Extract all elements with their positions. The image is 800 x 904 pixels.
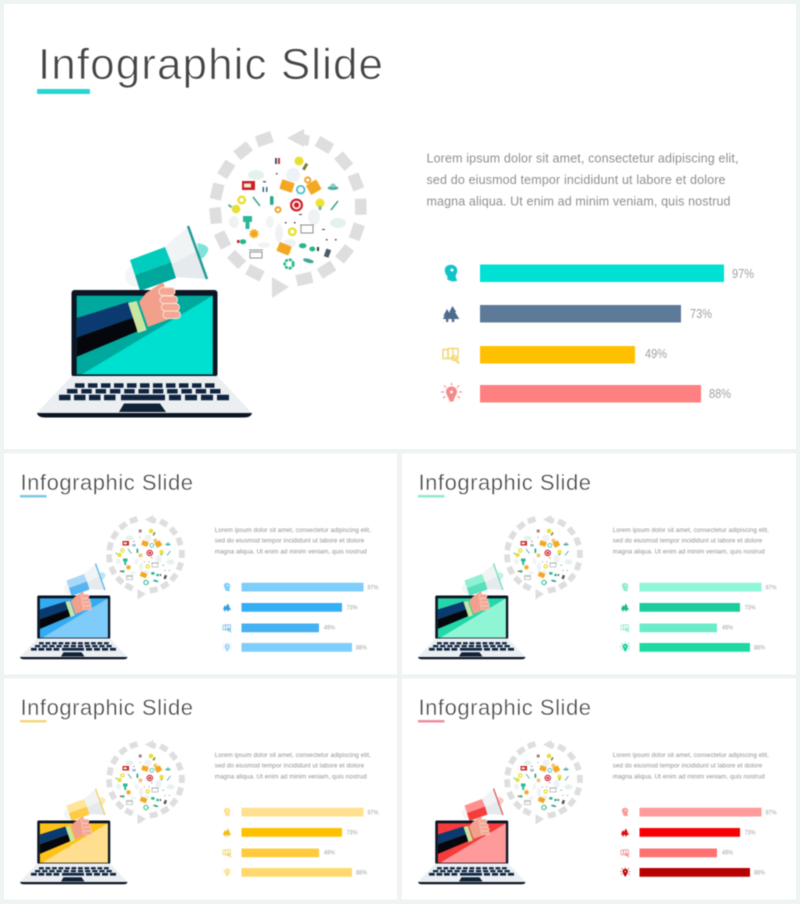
red slide contents: [418, 695, 777, 884]
green icons: [620, 583, 630, 651]
red bar chart: 97%: [766, 810, 777, 816]
yellow bar chart: 88%: [356, 870, 367, 876]
yellow bar chart: 73%: [346, 830, 358, 836]
yellow bar chart: 97%: [368, 810, 379, 816]
panel: yellow slide: [4, 678, 397, 900]
red description text: Lorem ipsum dolor sit amet, consectetur adipiscing elit,: [613, 752, 769, 759]
green bar chart: 97%: [766, 584, 777, 592]
main slide contents: [37, 40, 754, 418]
main illustration: laptop with megaphone and icon ring: [37, 129, 367, 418]
main description text: [426, 152, 738, 208]
main icon: light bulb: [441, 383, 462, 402]
yellow title underline: [20, 720, 46, 722]
panel: blue slide: [4, 454, 397, 674]
blue title underline: [20, 495, 46, 498]
main bar chart: 73%: [690, 307, 712, 321]
dashed ring with arrows: [209, 129, 367, 298]
blue bar chart: 49%: [324, 624, 335, 632]
blue description text: [215, 527, 371, 555]
red title: Infographic Slide: [418, 695, 591, 720]
green bar chart: [640, 583, 777, 652]
yellow title: Infographic Slide: [20, 695, 193, 720]
yellow bar chart: [242, 808, 379, 877]
main title underline: [37, 89, 90, 94]
blue description text: sed do eiusmod tempor incididunt ut labore et dolore: [215, 538, 365, 544]
blue illustration: [20, 515, 185, 659]
green description text: [613, 527, 769, 555]
blue bar chart: 88%: [356, 644, 367, 652]
red bar chart: 88%: [754, 870, 765, 876]
red illustration: [418, 740, 583, 884]
yellow bar chart: 49%: [324, 850, 335, 856]
red description text: sed do eiusmod tempor incididunt ut labore et dolore: [613, 762, 763, 770]
green description text: Lorem ipsum dolor sit amet, consectetur adipiscing elit,: [613, 527, 769, 534]
green title: Infographic Slide: [418, 470, 591, 495]
red icons: [620, 808, 630, 876]
blue slide contents: [20, 470, 379, 659]
green bar chart: 73%: [744, 604, 756, 612]
red bar chart: 49%: [722, 850, 733, 856]
laptop: [37, 290, 252, 418]
main description text: sed do eiusmod tempor incididunt ut labore et dolore: [426, 173, 726, 187]
main slide background: [4, 4, 796, 449]
yellow slide background: [4, 678, 397, 900]
panel: red slide: [402, 678, 796, 900]
green slide background: [402, 454, 796, 674]
yellow description text: magna aliqua. Ut enim ad minim veniam, quis nostrud: [215, 773, 367, 780]
blue slide background: [4, 454, 397, 674]
red description text: magna aliqua. Ut enim ad minim veniam, quis nostrud: [613, 773, 765, 780]
target icon: [290, 198, 303, 212]
blue description text: magna aliqua. Ut enim ad minim veniam, quis nostrud: [215, 548, 367, 555]
main bar chart: 97%: [732, 267, 754, 281]
arm and hand holding megaphone: [77, 282, 180, 357]
yellow illustration: [20, 740, 185, 884]
yellow slide contents: [20, 695, 379, 884]
red title underline: [418, 720, 444, 722]
blue description text: Lorem ipsum dolor sit amet, consectetur adipiscing elit,: [215, 527, 371, 534]
yellow description text: sed do eiusmod tempor incididunt ut labore et dolore: [215, 762, 365, 770]
blue bar chart: [242, 583, 379, 652]
blue bar chart: 73%: [346, 604, 358, 612]
panel: green slide: [402, 454, 796, 674]
red slide background: [402, 678, 796, 900]
blue title: Infographic Slide: [20, 470, 193, 495]
main title: Infographic Slide: [38, 40, 383, 89]
main icon: head: [445, 265, 457, 281]
main description text: magna aliqua. Ut enim ad minim veniam, quis nostrud: [426, 194, 731, 208]
main bar chart: 49%: [645, 347, 667, 361]
main description text: Lorem ipsum dolor sit amet, consectetur adipiscing elit,: [426, 152, 738, 166]
panel: main slide teal: [4, 4, 796, 449]
main icon: map with magnifier: [443, 348, 459, 364]
cluster of small marketing icons: [228, 156, 346, 268]
green title underline: [418, 495, 444, 498]
blue icons: [222, 583, 232, 651]
green slide contents: [418, 470, 777, 659]
red bar chart: 73%: [744, 830, 756, 836]
yellow icons: [222, 808, 232, 876]
green description text: sed do eiusmod tempor incididunt ut labore et dolore: [613, 538, 763, 544]
green illustration: [418, 515, 583, 659]
main bar chart: [480, 264, 754, 402]
green bar chart: 88%: [754, 644, 765, 652]
main bar chart: 88%: [709, 387, 731, 401]
green bar chart: 49%: [722, 624, 733, 632]
red description text: [613, 752, 769, 780]
yellow description text: [215, 752, 371, 780]
green description text: magna aliqua. Ut enim ad minim veniam, quis nostrud: [613, 548, 765, 555]
yellow description text: Lorem ipsum dolor sit amet, consectetur adipiscing elit,: [215, 752, 371, 759]
blue bar chart: 97%: [368, 584, 379, 592]
red bar chart: [640, 808, 777, 877]
main icon: trees: [443, 306, 459, 322]
megaphone: [125, 226, 208, 291]
